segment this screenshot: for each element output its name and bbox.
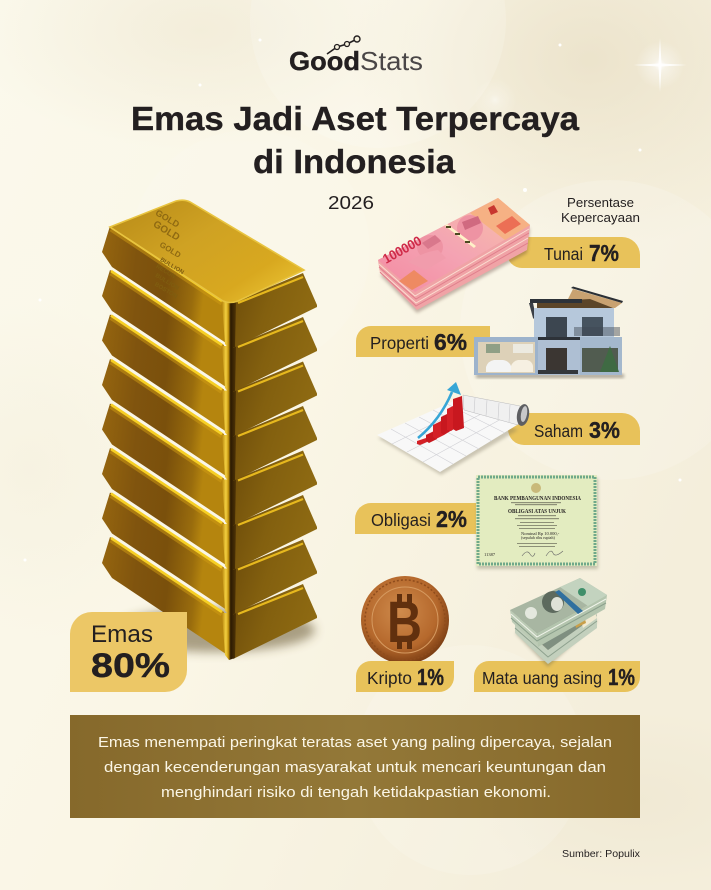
label: Properti 6%: 6% — [434, 329, 467, 355]
label: Tunai 7%: Tunai — [544, 244, 583, 264]
icon: stack of gold bars: BULLION — [159, 257, 185, 276]
icon: bond certificate: Nominal Rp 10.000,- — [521, 531, 560, 537]
label: Emas 80%: Emas — [91, 621, 153, 648]
panel: summary text: Emas menempati peringkat teratas aset yang paling dipercaya, sejalan — [98, 735, 612, 751]
logo: GoodStats: Good — [289, 46, 360, 76]
title: Emas Jadi Aset Terpercaya — [131, 100, 580, 137]
icon: stack of gold bars — [102, 200, 317, 660]
icon: bitcoin coin: B — [387, 590, 422, 655]
icon: stack of gold bars: RECON — [155, 264, 176, 280]
icon: stack of gold bars: BULLION — [154, 273, 180, 292]
label: Tunai 7%: 7% — [589, 240, 619, 266]
label: Obligasi 2%: Obligasi — [371, 510, 431, 530]
icon: bond certificate: BANK PEMBANGUNAN INDONESIA — [494, 495, 581, 502]
icon: bond certificate — [476, 475, 598, 569]
icon: stock chart — [377, 382, 531, 475]
label: Saham 3% — [508, 413, 640, 445]
label: Saham 3%: 3% — [589, 417, 620, 443]
label: Kripto 1%: 1% — [417, 664, 444, 690]
icon: bond certificate: 11387 — [484, 552, 496, 557]
column label: persentase kepercayaan — [561, 196, 640, 225]
panel: summary text: dengan kecenderungan masyarakat untuk mencari keuntungan dan — [104, 760, 606, 776]
label: Emas 80%: 80% — [91, 647, 170, 685]
label: Kripto 1% — [356, 661, 454, 692]
icon: stack of gold bars: BOSTON — [153, 282, 178, 300]
icon: dollar stacks — [510, 578, 607, 667]
column label: persentase kepercayaan: Kepercayaan — [561, 211, 640, 225]
icon: stack of gold bars: GOLD — [158, 240, 183, 260]
label: Obligasi 2% — [355, 503, 480, 534]
icon: rupiah banknote stack — [378, 198, 530, 313]
logo: GoodStats — [289, 36, 423, 76]
logo: GoodStats: Stats — [360, 46, 423, 76]
label: Saham 3%: Saham — [534, 421, 583, 441]
label: Mata uang asing 1%: Mata uang asing — [482, 668, 602, 688]
source: Sumber: Populix — [562, 849, 640, 860]
title: di Indonesia — [253, 143, 456, 180]
panel: summary text: menghindari risiko di tengah ketidakpastian ekonomi. — [161, 785, 551, 801]
icon: house — [474, 286, 624, 378]
label: Mata uang asing 1%: 1% — [608, 664, 635, 690]
label: Emas 80% — [70, 612, 187, 692]
year: 2026 — [328, 193, 374, 213]
title — [131, 100, 580, 180]
label: Properti 6%: Properti — [370, 333, 429, 353]
label: Kripto 1%: Kripto — [367, 668, 412, 688]
label: Properti 6% — [356, 326, 490, 357]
icon: rupiah banknote stack: 100000 — [380, 233, 424, 267]
label: Tunai 7% — [507, 237, 640, 268]
icon: stack of gold bars: GOLD — [154, 208, 182, 230]
label: Mata uang asing 1% — [474, 661, 640, 692]
panel: summary text — [70, 715, 640, 818]
icon: bond certificate: (sepuluh ribu rupiah) — [521, 535, 555, 540]
icon: stack of gold bars: GOLD — [151, 219, 181, 243]
column label: persentase kepercayaan: Persentase — [567, 196, 634, 210]
icon: bond certificate: OBLIGASI ATAS UNJUK — [508, 509, 566, 515]
icon: bitcoin coin — [361, 576, 449, 664]
label: Obligasi 2%: 2% — [436, 506, 467, 532]
